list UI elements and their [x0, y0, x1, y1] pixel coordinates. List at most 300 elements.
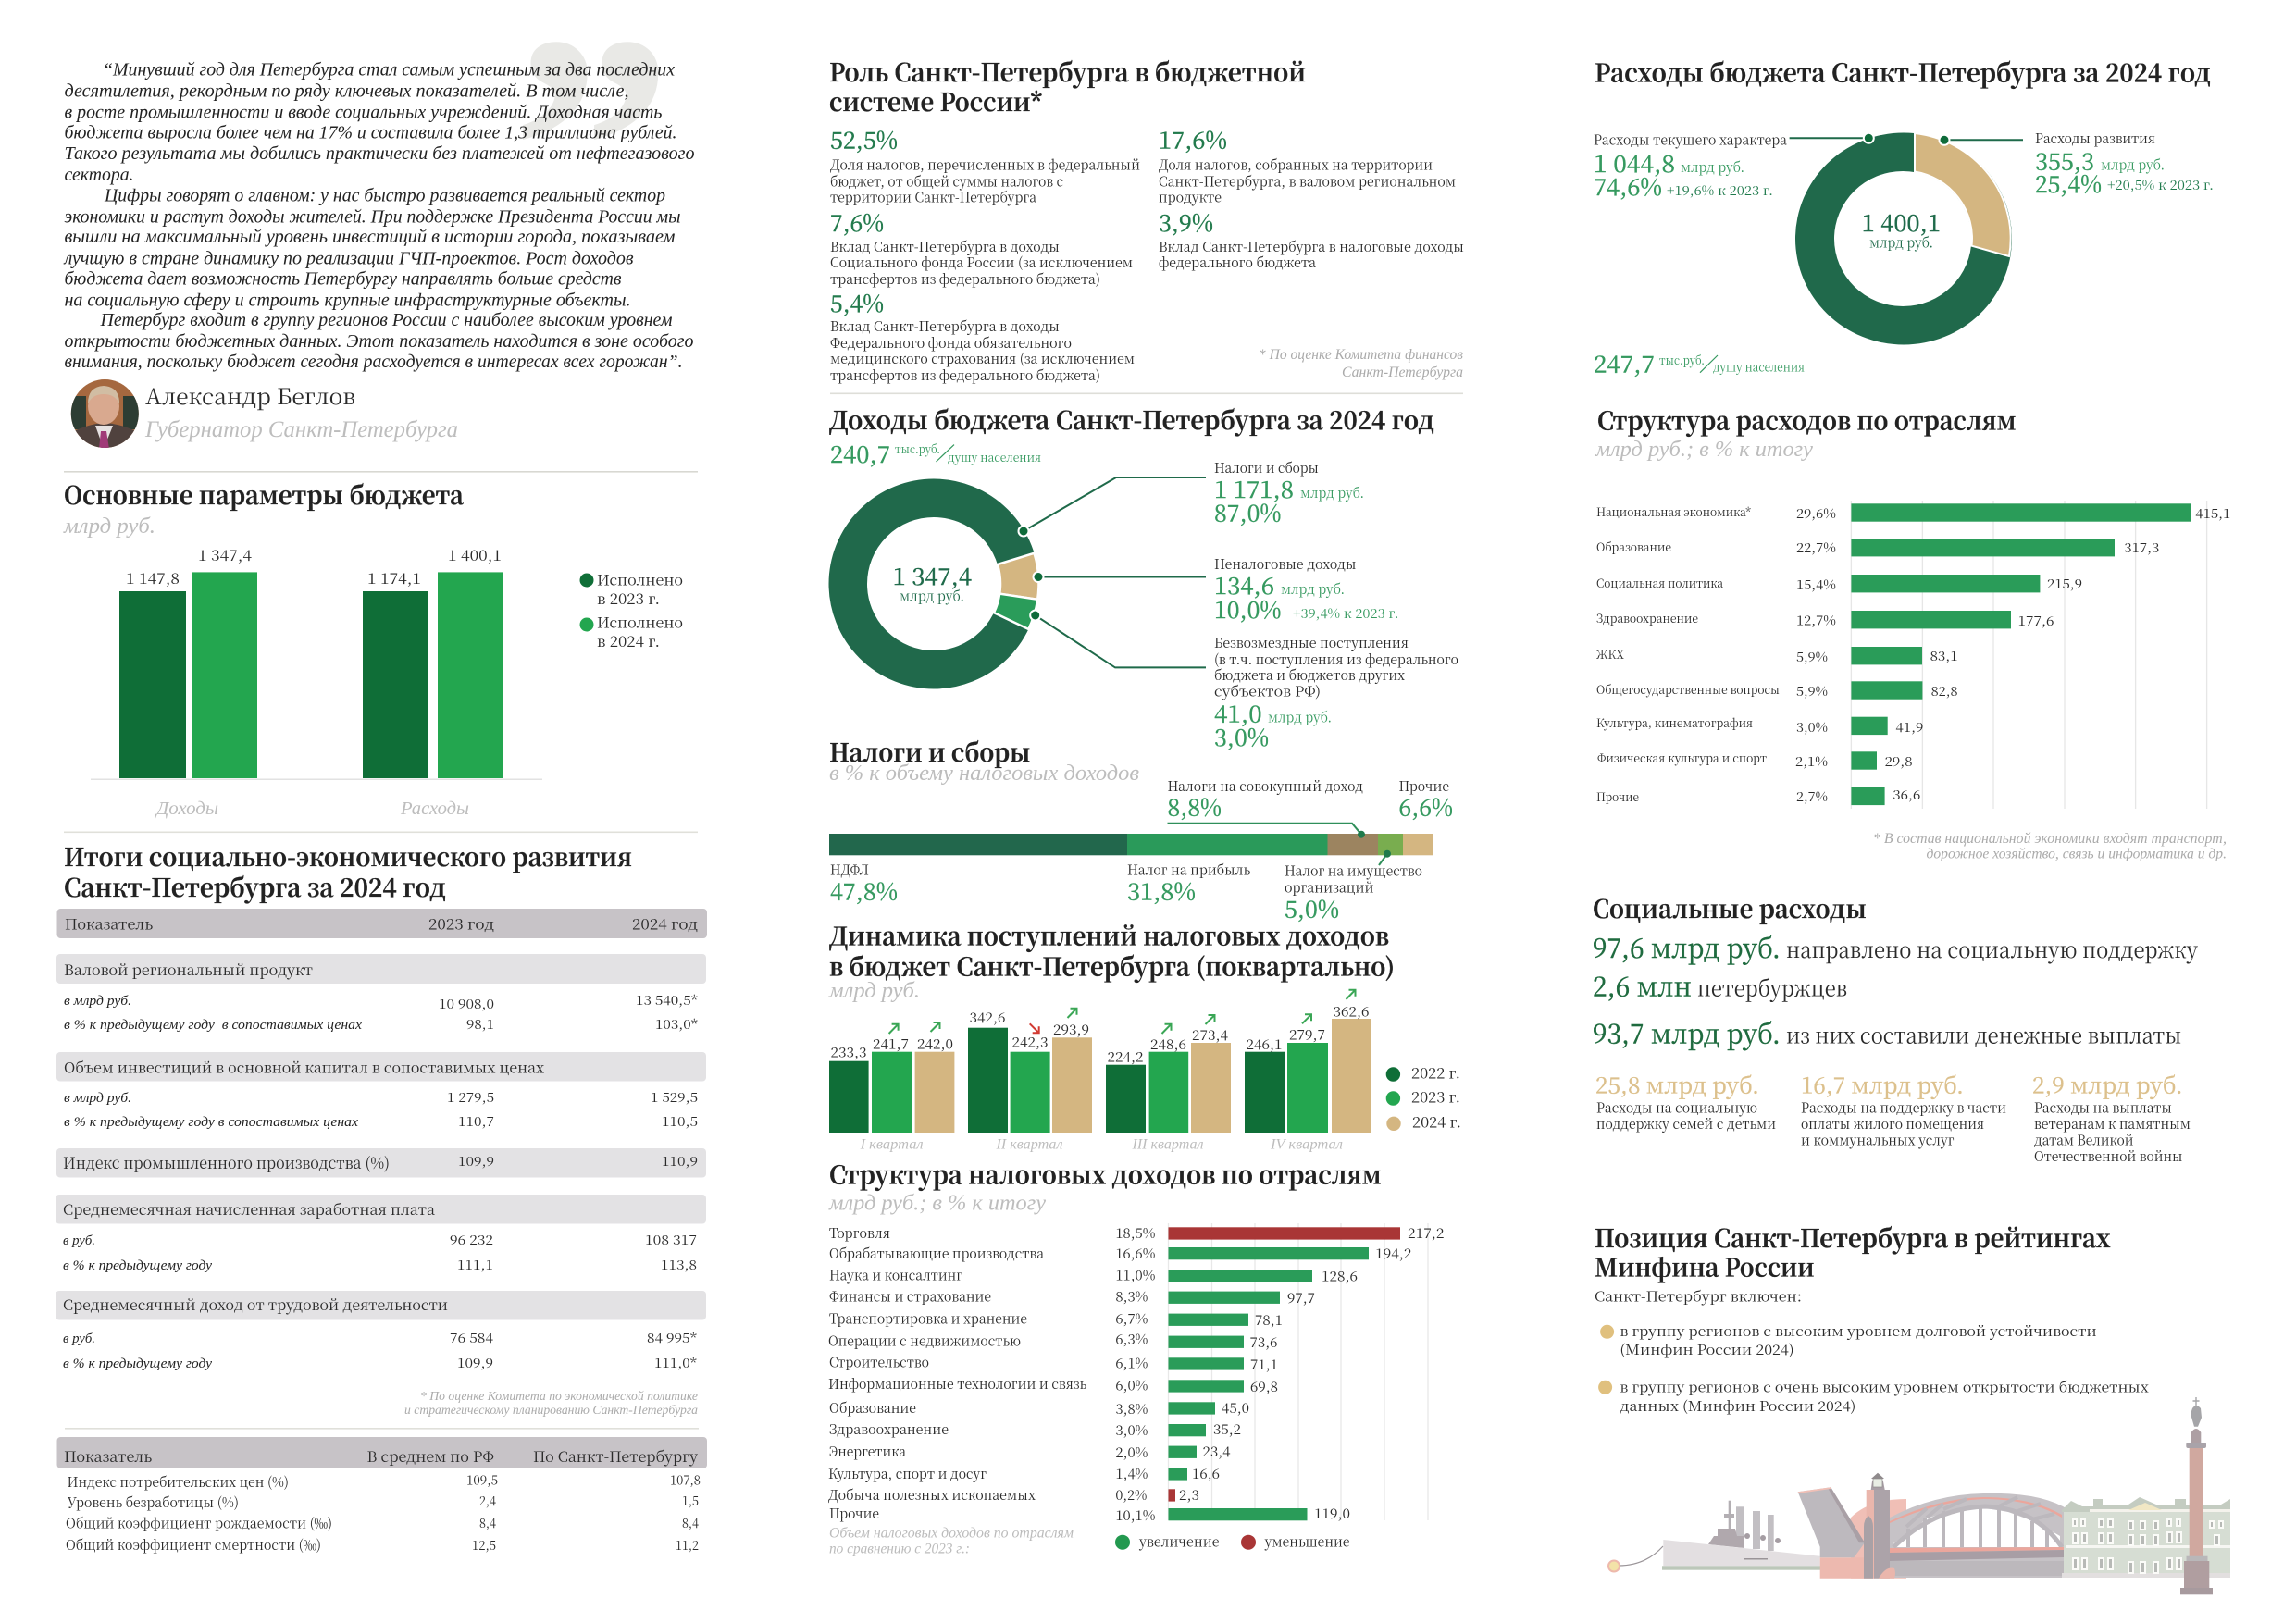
stat 17.6%	[1159, 123, 1456, 206]
icons: trend arrows	[889, 990, 1355, 1034]
horizontal bar chart: 0,2%	[1115, 1485, 1148, 1505]
label: taxes and fees: Налоги и сборы	[1214, 458, 1319, 477]
horizontal bar chart: 2,7%	[1796, 787, 1828, 806]
horizontal bar chart: Информационные технологии и связь	[828, 1374, 1086, 1394]
stat 7.6%	[830, 205, 1133, 289]
table row: investment: Объем инвестиций в основной капитал в сопоставимых ценах	[64, 1057, 544, 1077]
stat: housing support: 16,7 млрд руб.	[1801, 1068, 1964, 1099]
label: combined income tax: Налоги на совокупный доход	[1168, 776, 1363, 796]
heading: Основные параметры бюджета	[64, 476, 464, 512]
horizontal bar chart	[1596, 501, 2230, 809]
table row: death rate	[66, 1535, 699, 1555]
table row: investment: 1 279,5	[447, 1088, 494, 1107]
horizontal bar chart: Физическая культура и спорт	[1597, 749, 1767, 766]
horizontal bar chart: 78,1	[1255, 1310, 1283, 1330]
bar chart: quarters: IV квартал	[1270, 1137, 1343, 1153]
quote text: бюджета выросла более чем на 17% и составила более 1,3 триллиона рублей.	[65, 123, 677, 143]
chart note	[829, 1526, 1074, 1556]
bar chart: quarters: 233,3	[831, 1042, 866, 1061]
horizontal bar chart: Прочие	[1596, 787, 1639, 805]
panel: role of St Petersburg	[829, 53, 1464, 385]
legend: в 2024 г.	[597, 630, 660, 651]
horizontal bar chart: Операции с недвижимостью	[828, 1331, 1021, 1351]
label: current expenses: 74,6%	[1594, 169, 1662, 203]
horizontal bar chart: 69,8	[1250, 1377, 1278, 1396]
quote text: “Минувший год для Петербурга стал самым успешным за два последних	[103, 59, 675, 80]
table row: investment: 110,7	[458, 1112, 494, 1131]
table row: industrial production index	[56, 1148, 706, 1177]
bullet: budget openness	[1598, 1377, 2149, 1416]
stat: veterans: датам Великой	[2034, 1130, 2134, 1149]
table header: Показатель	[65, 912, 153, 935]
heading: в бюджет Санкт-Петербурга (поквартально)	[829, 947, 1395, 983]
table row: gross regional product: в млрд руб.	[64, 994, 131, 1009]
stat: housing support: оплаты жилого помещения	[1801, 1114, 1984, 1134]
horizontal bar chart: 6,3%	[1115, 1329, 1148, 1349]
per capita expenses: 247,7	[1594, 347, 1655, 380]
label: current expenses	[1594, 130, 1874, 203]
table row: unemployment: Уровень безработицы (%)	[67, 1493, 239, 1512]
bar chart: quarters: 242,3	[1012, 1032, 1048, 1051]
horizontal bar chart: Здравоохранение	[1596, 609, 1698, 626]
horizontal bar chart: 3,0%	[1115, 1420, 1148, 1440]
donut chart: expenses: 1 400,1	[1862, 205, 1941, 239]
bar chart: quarters: 293,9	[1053, 1020, 1089, 1039]
horizontal bar chart: 6,7%	[1115, 1308, 1148, 1329]
horizontal bar chart: Образование	[829, 1398, 916, 1418]
legend: Исполнено	[597, 611, 683, 633]
label: current expenses: Расходы текущего характера	[1594, 130, 1788, 150]
table row: average labour income: 76 584	[450, 1329, 493, 1347]
stat: housing support: и коммунальных услуг	[1801, 1130, 1955, 1149]
horizontal bar chart: 2,3	[1179, 1485, 1199, 1505]
horizontal bar chart: Энергетика	[829, 1442, 907, 1461]
horizontal bar chart: Обрабатывающие производства	[829, 1244, 1045, 1263]
leader line: non-tax	[1033, 572, 1206, 582]
bullet: debt sustainability: в группу регионов с высоким уровнем долговой устойчивости	[1620, 1321, 2097, 1341]
label: personal income tax: 47,8%	[830, 874, 898, 908]
label: development expenses: 25,4%	[2035, 167, 2102, 200]
label: non-tax revenue: +39,4% к 2023 г.	[1293, 604, 1399, 623]
footnote	[1873, 831, 2227, 862]
subtitle: млрд руб.	[63, 514, 155, 539]
table row: industrial production index: 109,9	[458, 1152, 494, 1171]
heading	[829, 917, 1395, 983]
horizontal bar chart: Финансы и страхование	[829, 1286, 991, 1307]
stat 3.9%: 3,9%	[1159, 205, 1213, 239]
stat 17.6%: Доля налогов, собранных на территории	[1159, 155, 1433, 175]
icon: governor portrait	[70, 379, 140, 449]
horizontal bar chart: 73,6	[1249, 1332, 1277, 1352]
horizontal bar chart: Социальная политика	[1596, 574, 1724, 591]
heading: Санкт-Петербурга за 2024 год	[64, 868, 446, 904]
horizontal bar chart: 215,9	[2047, 575, 2082, 593]
panel: expenses by industry	[1595, 401, 2230, 862]
horizontal bar chart: 12,7%	[1796, 611, 1836, 629]
horizontal bar chart: 3,8%	[1115, 1399, 1148, 1419]
table row: consumer price index: 107,8	[670, 1471, 701, 1490]
bar chart: revenues and expenses: 1 347,4	[198, 544, 252, 565]
icon: Alexander Column	[2180, 1397, 2213, 1594]
stat: families with children	[1595, 1068, 1776, 1134]
table row: average wage: 113,8	[661, 1256, 697, 1274]
bar chart: quarters: 248,6	[1150, 1035, 1186, 1054]
footnote: и стратегическому планированию Санкт-Петербурга	[404, 1404, 698, 1418]
table row: consumer price index: 109,5	[466, 1471, 498, 1490]
quote text: на социальную сферу и строить крупные инфраструктурные объекты.	[65, 290, 631, 310]
table row: birth rate	[66, 1514, 699, 1533]
table row: unemployment: 1,5	[682, 1492, 699, 1510]
horizontal bar chart: 71,1	[1250, 1355, 1278, 1374]
label: personal income tax: НДФЛ	[830, 861, 869, 880]
per capita revenue: душу населения	[948, 448, 1041, 465]
horizontal bar chart: Транспортировка и хранение	[829, 1308, 1027, 1329]
table row: death rate: Общий коэффициент смертности (‰)	[66, 1535, 321, 1555]
label: corporate property tax: Налог на имущество	[1285, 861, 1422, 881]
horizontal bar chart: 6,1%	[1115, 1353, 1148, 1373]
table row: death rate: 11,2	[676, 1536, 699, 1555]
table row: investment	[56, 1052, 706, 1131]
horizontal bar chart: 194,2	[1375, 1244, 1412, 1263]
stat 52.5%: территории Санкт-Петербурга	[830, 187, 1037, 206]
label: current expenses: +19,6% к 2023 г.	[1667, 181, 1773, 200]
bar chart: revenues and expenses: 1 174,1	[367, 567, 421, 588]
governor title: Губернатор Санкт-Петербурга	[144, 417, 458, 442]
label: grants: бюджета и бюджетов других	[1214, 665, 1405, 685]
horizontal bar chart: Торговля	[829, 1223, 890, 1243]
bar chart: quarters: 224,2	[1107, 1047, 1144, 1066]
horizontal bar chart: 10,1%	[1115, 1505, 1156, 1525]
legend	[579, 568, 683, 651]
stat: cash payments: из них составили денежные выплаты	[1786, 1018, 2182, 1050]
per capita expenses: душу населения	[1713, 358, 1805, 376]
chart note: по сравнению с 2023 г.:	[829, 1541, 970, 1556]
label: non-tax revenue: млрд руб.	[1281, 579, 1345, 599]
table row: average labour income: 111,0*	[654, 1354, 697, 1372]
horizontal bar chart: Наука и консалтинг	[829, 1266, 962, 1284]
stat 3.9%: федерального бюджета	[1159, 253, 1317, 272]
table row: death rate: 12,5	[472, 1536, 496, 1555]
stat: veterans: Отечественной войны	[2034, 1146, 2183, 1166]
quote text: бюджета дает возможность Петербургу направлять больше средств	[65, 268, 622, 289]
heading: Расходы бюджета Санкт-Петербурга за 2024 год	[1595, 53, 2211, 89]
stat: housing support	[1801, 1068, 2006, 1149]
bar chart: quarters: 241,7	[873, 1034, 909, 1053]
table row: average labour income: Среднемесячный доход от трудовой деятельности	[63, 1294, 448, 1315]
stat: veterans: Расходы на выплаты	[2034, 1097, 2172, 1117]
bar chart: revenues and expenses: Доходы	[155, 799, 218, 819]
table row: consumer price index	[67, 1471, 701, 1492]
label: other taxes: 6,6%	[1399, 790, 1453, 824]
legend: 2024 г.	[1412, 1111, 1461, 1133]
table row: gross regional product: 103,0*	[655, 1015, 698, 1034]
subtitle: млрд руб.; в % к итогу	[828, 1192, 1046, 1216]
bullet: debt sustainability	[1600, 1321, 2097, 1359]
quote text: Петербург входит в группу регионов России с наиболее высоким уровнем	[100, 310, 673, 330]
table row: investment: в млрд руб.	[64, 1091, 131, 1106]
table row: gross regional product	[56, 954, 706, 1034]
horizontal bar chart: ЖКХ	[1596, 645, 1624, 663]
bar chart: quarters: 273,4	[1192, 1025, 1228, 1045]
panel: budget revenues	[829, 401, 1458, 753]
bar chart: quarters: II квартал	[995, 1137, 1063, 1153]
label: grants: Безвозмездные поступления	[1214, 633, 1409, 652]
heading	[829, 53, 1306, 118]
panel: social expenses	[1593, 889, 2199, 1166]
footnote	[404, 1390, 698, 1418]
horizontal bar chart: 36,6	[1893, 786, 1921, 804]
bar chart: quarters: I квартал	[860, 1137, 924, 1153]
stat: veterans	[2032, 1068, 2191, 1166]
legend: в 2023 г.	[597, 588, 660, 609]
icon: cruiser Aurora	[1662, 1501, 1821, 1570]
label: profit tax: 31,8%	[1127, 874, 1196, 908]
icon: bridge tower	[1864, 1473, 1895, 1579]
footnote: * В состав национальной экономики входят транспорт,	[1873, 831, 2227, 847]
panel: main budget parameters	[63, 476, 683, 819]
heading: Структура расходов по отраслям	[1597, 401, 2016, 437]
horizontal bar chart: 5,9%	[1796, 682, 1828, 700]
legend	[1386, 1062, 1461, 1133]
horizontal bar chart: 177,6	[2017, 612, 2054, 630]
subtitle: млрд руб.	[828, 979, 920, 1003]
horizontal bar chart: Образование	[1596, 538, 1671, 555]
legend: увеличение	[1138, 1532, 1220, 1552]
label: taxes and fees: 87,0%	[1214, 496, 1281, 529]
horizontal bar chart: 18,5%	[1115, 1223, 1156, 1243]
quote text	[64, 59, 694, 372]
stat: residents: петербуржцев	[1697, 971, 1847, 1003]
label: development expenses	[1940, 129, 2214, 200]
footnote: * По оценке Комитета финансов	[1259, 347, 1463, 363]
horizontal bar chart: 6,0%	[1115, 1375, 1148, 1395]
stat 52.5%: Доля налогов, перечисленных в федеральный	[830, 155, 1140, 175]
stat: residents: 2,6 млн	[1593, 967, 1692, 1005]
heading: Социальные расходы	[1593, 889, 1867, 925]
bar chart: revenues and expenses: Расходы	[400, 799, 469, 819]
horizontal bar chart: 415,1	[2195, 504, 2230, 523]
icon: Winter Palace	[2062, 1497, 2230, 1578]
label: grants: 3,0%	[1214, 720, 1269, 753]
stat 3.9%	[1159, 205, 1464, 272]
label: grants: 41,0	[1214, 697, 1262, 730]
quote text: внимания, поскольку бюджет сегодня расходуется в интересах всех горожан”.	[65, 352, 683, 372]
stat: social support: направлено на социальную поддержку	[1786, 932, 2199, 964]
panel: tax revenue by industry	[828, 1155, 1444, 1556]
stat: social support	[1593, 928, 2199, 966]
table row: average wage: 96 232	[450, 1231, 493, 1249]
stat: veterans: 2,9 млрд руб.	[2032, 1068, 2183, 1099]
table header: 2023 год	[428, 912, 494, 935]
table header: Показатель	[64, 1445, 152, 1467]
stat 3.9%: Вклад Санкт-Петербурга в налоговые доходы	[1159, 237, 1464, 256]
stat 5.4%	[830, 286, 1135, 385]
bullet: budget openness: в группу регионов с очень высоким уровнем открытости бюджетных	[1620, 1377, 2149, 1396]
stat 7.6%: Вклад Санкт-Петербурга в доходы	[830, 237, 1060, 256]
table header	[57, 1437, 707, 1468]
panel: comparison table with Russia	[57, 1437, 707, 1555]
table row: average wage: 108 317	[645, 1231, 697, 1249]
table row: unemployment: 2,4	[479, 1492, 496, 1510]
legend: уменьшение	[1264, 1532, 1350, 1552]
panel: governor quote	[64, 0, 694, 449]
horizontal bar chart: Общегосударственные вопросы	[1596, 680, 1780, 698]
label: development expenses: млрд руб.	[2101, 155, 2165, 174]
table row: investment: 110,5	[662, 1112, 698, 1131]
table row: average labour income: 109,9	[457, 1354, 493, 1372]
horizontal bar chart: 16,6%	[1115, 1244, 1156, 1263]
horizontal bar chart: 8,3%	[1115, 1286, 1148, 1307]
heading: Налоги и сборы	[829, 733, 1031, 769]
label: non-tax revenue	[1214, 554, 1399, 626]
table row: average labour income: в % к предыдущему году	[63, 1357, 212, 1371]
label: taxes and fees: 1 171,8	[1214, 472, 1294, 505]
label: current expenses: млрд руб.	[1681, 157, 1744, 177]
legend: Исполнено	[597, 568, 683, 590]
label: corporate property tax: 5,0%	[1285, 892, 1339, 925]
horizontal bar chart: 23,4	[1203, 1442, 1231, 1461]
quote text: сектора.	[65, 165, 133, 185]
leader line: grants	[1030, 611, 1206, 667]
heading: системе России*	[829, 82, 1042, 118]
heading: Доходы бюджета Санкт-Петербурга за 2024 год	[829, 401, 1434, 437]
donut chart: expenses	[1795, 133, 2012, 344]
horizontal bar chart: 2,1%	[1795, 752, 1828, 771]
label: grants: (в т.ч. поступления из федерального	[1214, 650, 1458, 669]
horizontal bar chart: Прочие	[829, 1504, 879, 1523]
heading: Минфина России	[1595, 1247, 1815, 1284]
table row: gross regional product: 10 908,0	[439, 995, 494, 1013]
icon: buoy and cable	[1608, 1546, 1663, 1571]
table row: average wage: Среднемесячная начисленная заработная плата	[63, 1198, 435, 1220]
quote text: экономики и растут доходы жителей. При поддержке Президента России мы	[65, 206, 681, 227]
bar chart: quarters: 362,6	[1333, 1001, 1370, 1021]
table header: По Санкт-Петербургу	[533, 1445, 698, 1467]
label: current expenses: 1 044,8	[1594, 146, 1675, 180]
stat 5.4%: 5,4%	[830, 286, 884, 319]
table row: industrial production index: Индекс промышленного производства (%)	[63, 1150, 390, 1173]
horizontal bar chart: Культура, спорт и досуг	[828, 1464, 987, 1483]
horizontal bar chart: 16,6	[1192, 1464, 1220, 1483]
horizontal bar chart: 82,8	[1931, 682, 1958, 700]
table row: gross regional product: 98,1	[466, 1015, 494, 1034]
horizontal bar chart: 3,0%	[1796, 718, 1828, 737]
table row: investment: в % к предыдущему году в сопоставимых ценах	[64, 1115, 358, 1130]
stat: veterans: ветеранам к памятным	[2034, 1114, 2191, 1134]
footnote	[1259, 347, 1463, 380]
stat: residents	[1593, 967, 1847, 1005]
label: corporate property tax: организаций	[1285, 877, 1373, 897]
horizontal bar chart: Национальная экономика*	[1596, 502, 1751, 520]
panel: taxes and fees	[829, 733, 1453, 925]
label: profit tax	[1127, 861, 1250, 908]
legend: 2022 г.	[1411, 1062, 1460, 1084]
stat: families with children: 25,8 млрд руб.	[1595, 1068, 1759, 1099]
table row: unemployment	[67, 1492, 699, 1512]
label: grants: млрд руб.	[1268, 708, 1332, 727]
horizontal bar chart: 15,4%	[1796, 576, 1836, 594]
heading: Роль Санкт-Петербурга в бюджетной	[829, 53, 1306, 89]
bar chart: quarters: 342,6	[970, 1008, 1005, 1027]
label: corporate property tax	[1285, 850, 1422, 925]
stat 5.4%: медицинского страхования (за исключением	[830, 349, 1135, 368]
stat: social support: 97,6 млрд руб.	[1593, 928, 1781, 966]
bar chart: revenues and expenses: 1 400,1	[448, 544, 502, 565]
subtitle: в % к объему налоговых доходов	[829, 762, 1139, 786]
table row: average labour income	[56, 1291, 706, 1372]
stat: cash payments	[1593, 1014, 2182, 1052]
quote text: открытости бюджетных данных. Этот показатель находится в зоне особого	[65, 331, 694, 352]
bar chart: quarters	[829, 1001, 1371, 1153]
chart note: Объем налоговых доходов по отраслям	[829, 1526, 1074, 1542]
donut chart: revenues	[848, 498, 1038, 670]
label: development expenses: 355,3	[2035, 143, 2094, 177]
horizontal bar chart: Здравоохранение	[829, 1419, 949, 1439]
label: non-tax revenue: 10,0%	[1214, 592, 1281, 626]
horizontal bar chart: Культура, кинематография	[1596, 713, 1753, 731]
horizontal bar chart: 35,2	[1213, 1419, 1241, 1439]
per capita revenue: тыс.руб.	[895, 440, 940, 457]
table row: average labour income: 84 995*	[647, 1329, 697, 1347]
horizontal bar chart: 22,7%	[1796, 539, 1836, 557]
panel: socio-economic results table	[56, 837, 707, 1418]
footnote: * По оценке Комитета по экономической политике	[420, 1390, 698, 1404]
stat: families with children: поддержку семей с детьми	[1596, 1114, 1776, 1134]
quote text: Цифры говорят о главном: у нас быстро развивается реальный сектор	[104, 185, 665, 205]
table row: birth rate: 8,4	[479, 1514, 496, 1532]
table row: average labour income: в руб.	[63, 1332, 95, 1346]
heading: Динамика поступлений налоговых доходов	[829, 917, 1389, 953]
heading: Структура налоговых доходов по отраслям	[829, 1155, 1382, 1191]
panel: ministry of finance ratings	[1595, 1219, 2230, 1594]
icon: raised bridge span	[1798, 1487, 1906, 1579]
table row: average wage: в % к предыдущему году	[63, 1258, 212, 1273]
horizontal bar chart: Строительство	[829, 1353, 929, 1371]
stat 52.5%: 52,5%	[830, 123, 898, 156]
table row: consumer price index: Индекс потребительских цен (%)	[67, 1472, 289, 1492]
horizontal bar chart: 83,1	[1930, 647, 1958, 665]
stat 7.6%: 7,6%	[830, 205, 884, 239]
horizontal bar chart: 2,0%	[1115, 1443, 1148, 1462]
table row: average wage	[56, 1195, 706, 1274]
heading: Итоги социально-экономического развития	[64, 837, 632, 873]
stat 52.5%: бюджет, от общей суммы налогов с	[830, 172, 1063, 191]
stat: housing support: Расходы на поддержку в части	[1801, 1097, 2006, 1117]
heading	[1595, 1219, 2110, 1284]
donut chart: revenues: млрд руб.	[900, 587, 964, 605]
stacked bar	[829, 834, 1433, 855]
horizontal bar chart: 97,7	[1287, 1288, 1315, 1307]
footnote: дорожное хозяйство, связь и информатика и др.	[1927, 847, 2227, 862]
label: profit tax: Налог на прибыль	[1127, 861, 1250, 880]
table row: gross regional product: в % к предыдущему году в сопоставимых ценах	[64, 1018, 362, 1033]
horizontal bar chart: 1,4%	[1115, 1464, 1148, 1483]
table row: gross regional product: 13 540,5*	[636, 991, 698, 1010]
bar chart: revenues and expenses: 1 147,8	[126, 567, 180, 588]
quote text: Такого результата мы добились практически без платежей от нефтегазового	[65, 143, 694, 164]
label: combined income tax	[1168, 776, 1365, 838]
table row: average wage: 111,1	[457, 1256, 493, 1274]
horizontal bar chart: Добыча полезных ископаемых	[828, 1485, 1036, 1505]
label: combined income tax: 8,8%	[1168, 790, 1222, 824]
label: development expenses: +20,5% к 2023 г.	[2107, 176, 2214, 194]
legend	[1115, 1532, 1350, 1552]
stat 52.5%	[830, 123, 1140, 206]
stat 5.4%: Вклад Санкт-Петербурга в доходы	[830, 316, 1060, 336]
label: other taxes: Прочие	[1399, 776, 1449, 796]
table header	[57, 909, 707, 938]
table row: average wage: в руб.	[63, 1233, 95, 1248]
